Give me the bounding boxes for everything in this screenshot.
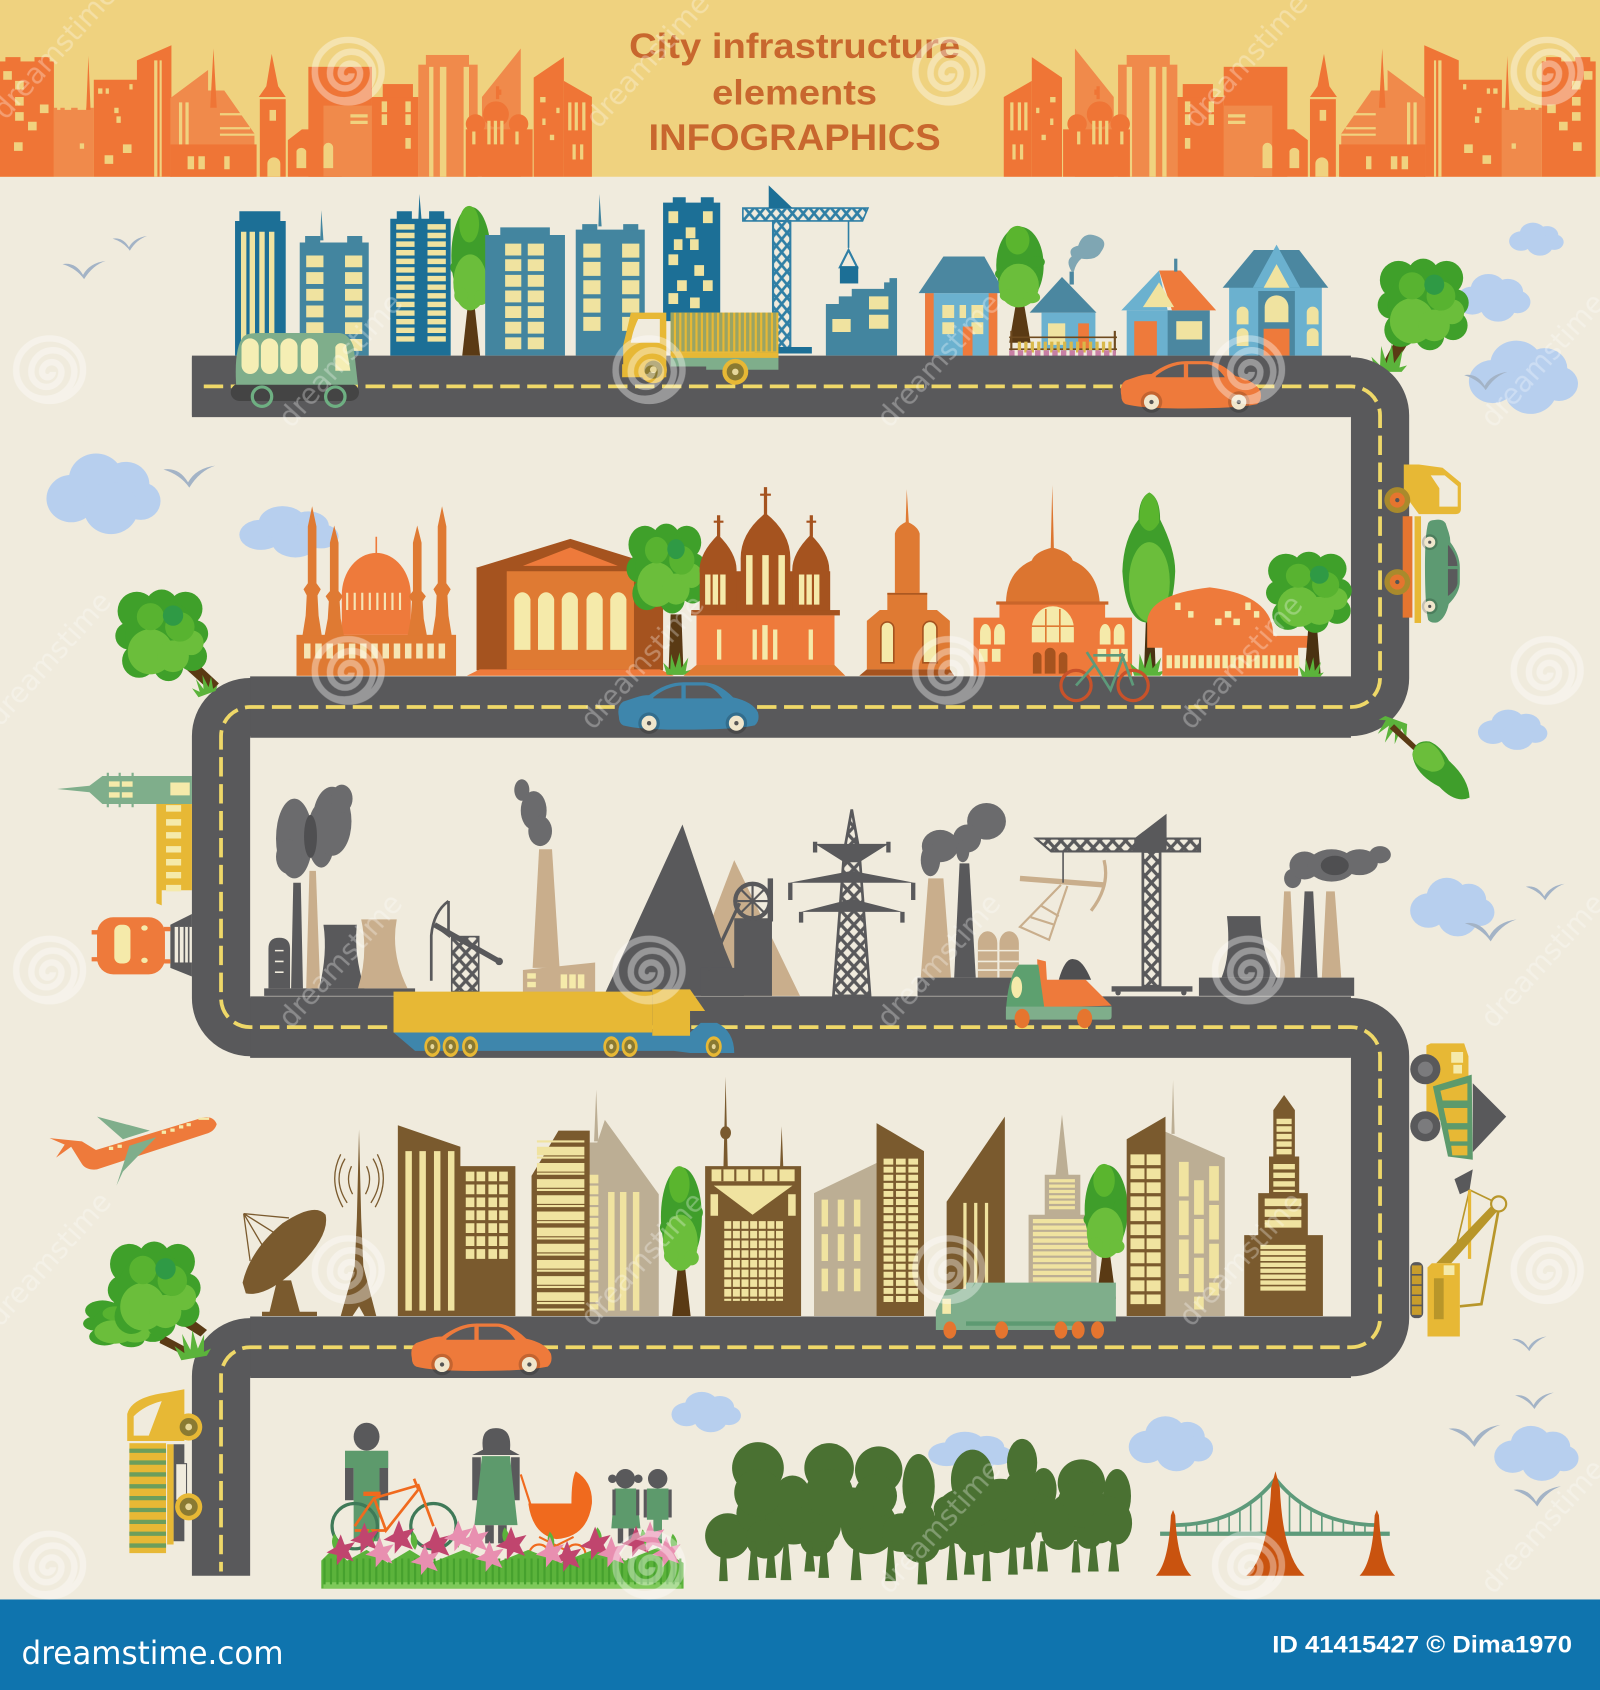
- mosque: [296, 506, 456, 676]
- man: [345, 1423, 388, 1541]
- tree: [1084, 1164, 1129, 1299]
- spired green tram: [57, 773, 192, 905]
- excavator: [1410, 1169, 1506, 1336]
- building pair 4: [1127, 1080, 1225, 1316]
- tree: left of fourth road: [83, 1242, 212, 1361]
- tan oil derrick: [1020, 860, 1106, 940]
- title: INFOGRAPHICS: [649, 117, 941, 158]
- cottage with smoke: [1030, 235, 1104, 350]
- watermark text: dreamstime: [870, 887, 1007, 1034]
- image id: ID 41415427 © Dima1970: [1272, 1632, 1572, 1658]
- green truck: [936, 1283, 1116, 1339]
- car: orange top road: [1121, 361, 1261, 413]
- building pair 2: [532, 1090, 659, 1316]
- tree: [450, 206, 492, 356]
- tree: [1122, 493, 1175, 676]
- museum: [467, 539, 674, 676]
- rotated yellow truck: [127, 1389, 202, 1553]
- car: orange fourth road: [411, 1324, 552, 1375]
- building: tall windows: [576, 194, 645, 356]
- boy: [644, 1469, 672, 1543]
- rotated dump truck: [1410, 1043, 1506, 1160]
- right skyline: [1004, 45, 1596, 177]
- row 3: industry: [264, 779, 1391, 1057]
- side vehicles right of fourth road: [1410, 1043, 1506, 1336]
- flowers and grass: [321, 1520, 684, 1589]
- bicycle: [332, 1479, 456, 1549]
- antenna tower: [335, 1130, 383, 1316]
- tree: [1266, 552, 1352, 677]
- satellite dish: [243, 1210, 326, 1316]
- watermark text: dreamstime: [574, 1185, 711, 1333]
- clouds: [46, 223, 1579, 1481]
- building: banded tower: [390, 194, 451, 356]
- building pair 1: [398, 1125, 515, 1316]
- row 4: brown high-rises: [83, 1077, 1323, 1375]
- building: stepped tower: [1029, 1114, 1096, 1290]
- dump truck: [1006, 959, 1112, 1028]
- footer bar: [0, 1599, 1600, 1690]
- woman: [472, 1428, 520, 1543]
- car: blue: [618, 682, 759, 734]
- row 1: blue residential buildings: [235, 185, 1469, 372]
- side vehicles: yellow truck and green car: [1384, 465, 1461, 623]
- watermark text: dreamstime: [870, 287, 1007, 434]
- left skyline: [0, 45, 592, 177]
- pylon: [789, 809, 914, 996]
- stadium: [1147, 587, 1309, 676]
- tree: [660, 1166, 703, 1316]
- watermark text: dreamstime: [272, 287, 409, 434]
- house: large gabled: [1223, 245, 1328, 356]
- row 2: orange landmark buildings: [115, 485, 1352, 734]
- title: elements: [712, 73, 877, 113]
- building: spired high-rise: [1244, 1095, 1323, 1316]
- house: orange roof: [1121, 259, 1216, 356]
- building: stepped: [826, 278, 897, 356]
- power station chimneys and smoke: [264, 785, 415, 996]
- logo text: dreamstime.com: [22, 1634, 284, 1672]
- bridge: [1156, 1471, 1395, 1576]
- oil pump: [431, 901, 502, 992]
- watermark text: dreamstime: [272, 887, 409, 1034]
- pram: [521, 1471, 592, 1564]
- tall stack and smoke: [514, 779, 595, 996]
- watermark text: dreamstime: [574, 588, 711, 735]
- mine mountains and headframe: [604, 825, 800, 996]
- building: wedge: [947, 1117, 1005, 1316]
- factory stacks and smoke: [918, 803, 1027, 996]
- header banner: [0, 0, 1600, 177]
- road: [192, 386, 1380, 1576]
- tower church: [859, 489, 954, 676]
- building: grid tower: [485, 227, 565, 356]
- building: windows tower: [300, 210, 369, 356]
- girl: [608, 1469, 643, 1543]
- long yellow truck: [394, 989, 734, 1057]
- bus: [231, 333, 359, 406]
- watermark text: dreamstime: [1172, 588, 1309, 735]
- building: centre with antennas: [705, 1077, 801, 1316]
- park: family with bicycle and pram: [321, 1423, 684, 1589]
- tree: [627, 524, 706, 675]
- watermark text: dreamstime: [870, 1453, 1007, 1600]
- title: [629, 26, 960, 158]
- domed hall: [974, 485, 1132, 676]
- right power plant: [1199, 846, 1391, 996]
- title: City infrastructure: [629, 26, 960, 66]
- tree: top right: [1371, 259, 1469, 372]
- orange tram: [92, 914, 192, 976]
- building pair 3: [814, 1123, 924, 1316]
- building: striped tower: [235, 211, 286, 356]
- bicycle: [1061, 652, 1148, 701]
- house: blue roof: [919, 257, 1005, 356]
- building: scattered windows: [663, 197, 720, 321]
- forest: [705, 1439, 1132, 1584]
- fence and flowers: [1009, 331, 1117, 354]
- plane: [50, 1117, 217, 1186]
- dark crane: [1036, 814, 1200, 995]
- tree hanging right of second road: [1372, 714, 1470, 799]
- tree left of second road: [115, 590, 219, 698]
- church with onion domes: [684, 487, 845, 676]
- side vehicles left of third road: [57, 773, 192, 976]
- tree: [995, 226, 1045, 343]
- truck: yellow with container: [622, 313, 778, 385]
- birds: [63, 236, 1565, 1506]
- crane: [743, 185, 868, 354]
- watermark text: dreamstime: [1172, 1185, 1309, 1333]
